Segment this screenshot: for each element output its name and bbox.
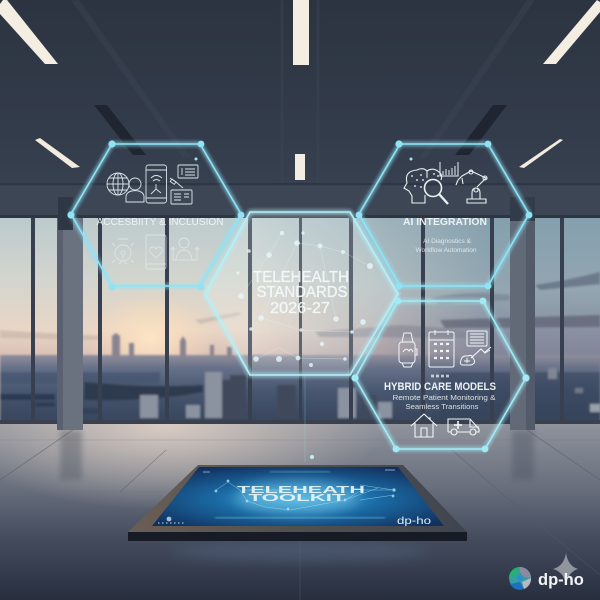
- hexagon nodes: [67, 140, 244, 290]
- icons: house, ambulance: [411, 414, 479, 437]
- connector dots from tablet: [305, 375, 314, 462]
- network dots: [236, 231, 373, 367]
- window mullions: [0, 218, 600, 424]
- description: hybrid care: Seamless Transitions: [406, 402, 479, 411]
- description: hybrid care: [392, 393, 496, 411]
- aperture icon: [509, 567, 531, 590]
- floor: [0, 424, 600, 600]
- background: window and skyline: [0, 218, 600, 422]
- tablet logo: dp-ho: [397, 516, 432, 527]
- hexagon nodes: [351, 298, 530, 452]
- hexagon: AI integration: [356, 140, 532, 289]
- columns: [57, 197, 535, 430]
- description: AI diagnostics: [416, 238, 477, 254]
- tablet screen: [152, 467, 444, 526]
- background: office ceiling: [0, 0, 600, 220]
- hexagon: telehealth standards: [205, 212, 398, 375]
- connector line between hexagons: [194, 158, 412, 160]
- hexagon nodes: [356, 140, 532, 289]
- heading: telehealth standards: 2026-27: [270, 300, 330, 317]
- heading: hybrid care models: HYBRID CARE MODELS: [384, 381, 496, 393]
- heading: accessibility and inclusion: ACCESBIITY & INCLUSION: [96, 217, 224, 228]
- tablet heading: TOOLKIT: [248, 492, 347, 504]
- tablet small icon: [158, 470, 395, 523]
- tablet body: [128, 465, 467, 541]
- heading: telehealth standards: STANDARDS: [256, 284, 348, 301]
- heading: telehealth standards: [253, 269, 349, 317]
- tablet glow reflection: [170, 542, 430, 562]
- heading: telehealth standards: TELEHEALTH: [253, 269, 349, 286]
- central hexagon fill: [205, 212, 398, 375]
- icons: watch, calendar, chart, cloud: [399, 330, 491, 376]
- hexagon: accessibility and inclusion: [67, 140, 244, 290]
- tablet heading: TELEHEATH: [237, 484, 365, 496]
- tablet: [128, 465, 467, 562]
- ceiling lights: [0, 0, 600, 180]
- description: AI diagnostics: AI Diagnostics &: [423, 238, 472, 245]
- hexagon: hybrid care models: [351, 298, 530, 452]
- icons: globe, person, phone, documents: [107, 165, 199, 269]
- network on screen: [215, 480, 396, 510]
- tablet heading: [237, 484, 365, 504]
- heading: AI integration: AI INTEGRATION: [403, 216, 487, 228]
- description: AI diagnostics: Workflow Automation: [416, 247, 477, 254]
- icons: brain, magnifier, chart, robot arm: [404, 162, 487, 204]
- sparkle icon: [553, 553, 578, 585]
- description: hybrid care: Remote Patient Monitoring &: [392, 393, 496, 402]
- brand text: dp-ho: [538, 571, 584, 589]
- logo: dp-ho watermark: [509, 553, 584, 590]
